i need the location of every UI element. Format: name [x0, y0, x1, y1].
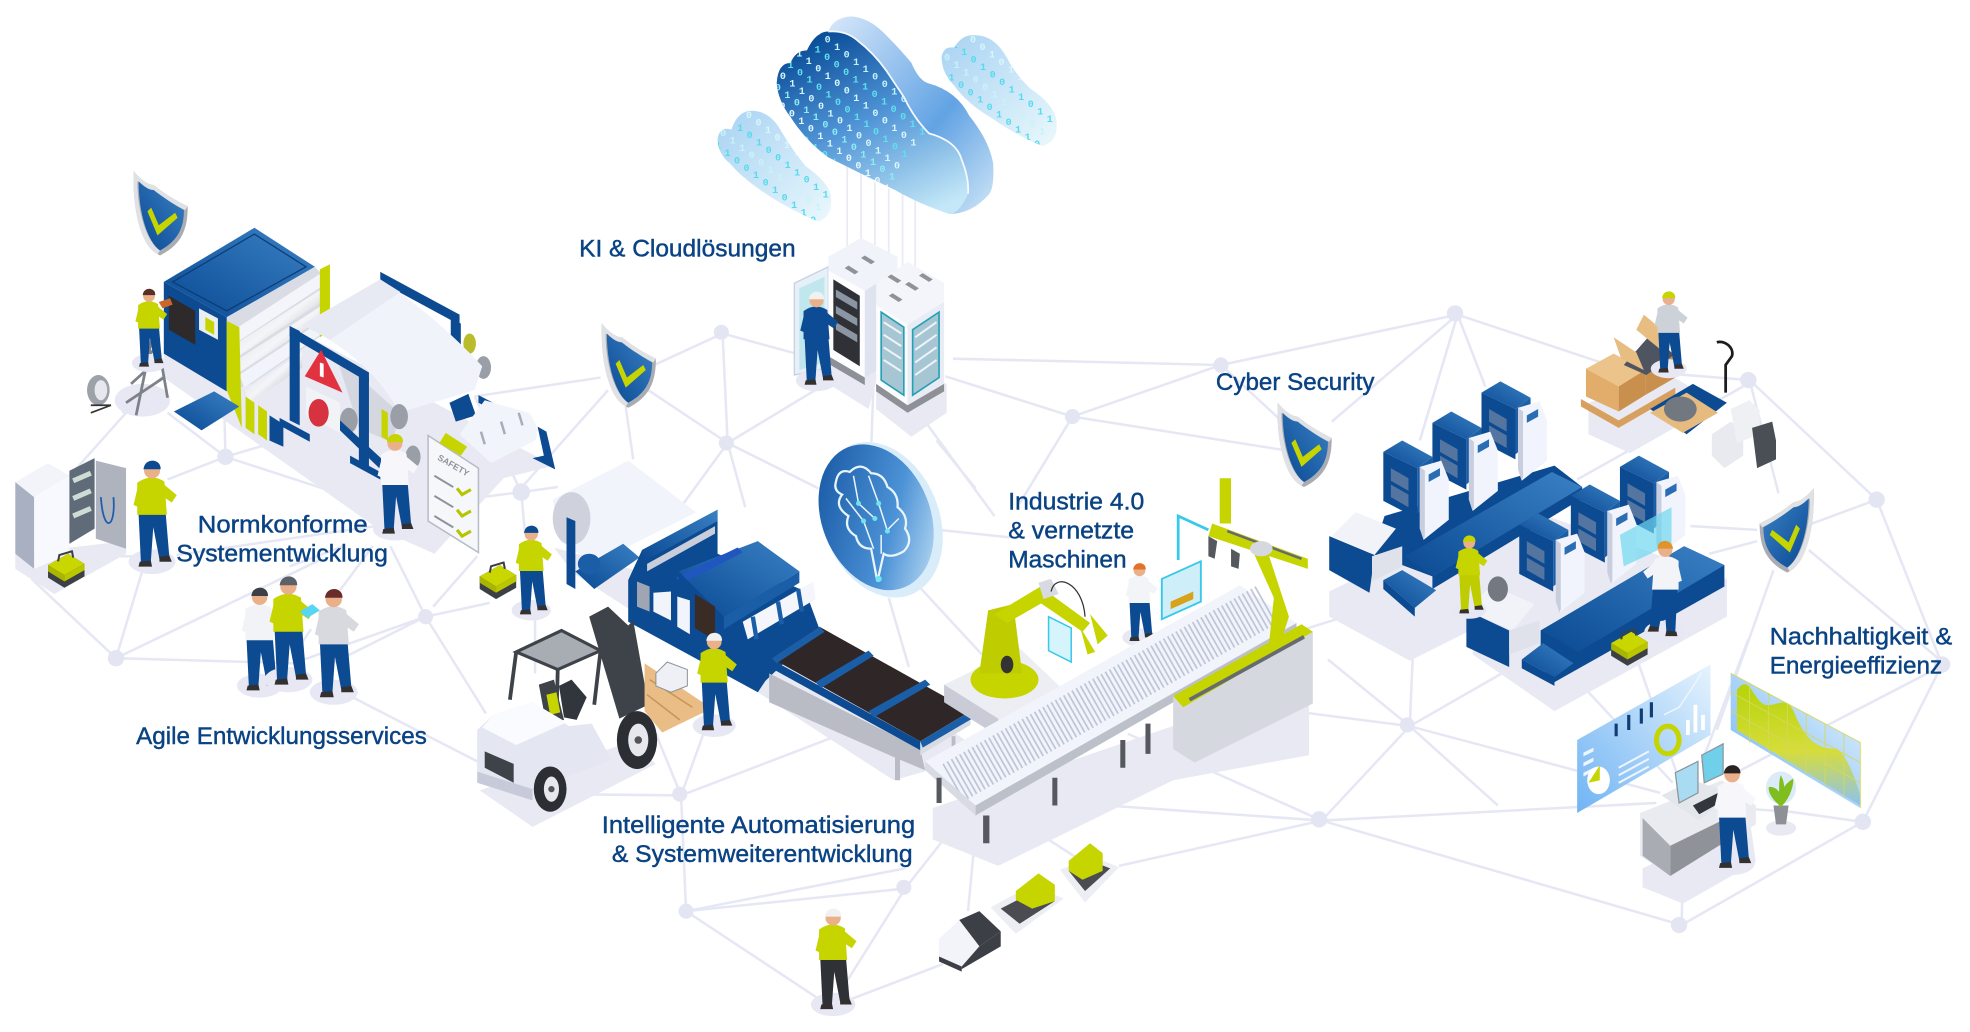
small cloud left: 1 1 0 0 1 0 1 0 1 1 0: [710, 139, 821, 230]
team of three people: [237, 576, 359, 705]
heading: Cyber Security: Cyber Security: [1216, 369, 1375, 396]
big data cloud: 1 0 0 1 1 0 1 0 1 1 0 0 1 1: [750, 96, 890, 209]
small cloud left: 1 0 0 1 0 1 1 0 0 1 0: [731, 101, 843, 192]
contactors: [1712, 400, 1776, 468]
shield top left: [133, 171, 188, 255]
worker at pallet: [693, 633, 737, 737]
small cloud left: 0 1 1 0 0 1 1 1 0 0 1: [715, 126, 826, 217]
server racks with technician: [794, 238, 944, 413]
worker with tablet: [811, 908, 857, 1016]
heading: KI & Cloudlösungen: KI & Cloudlösungen: [579, 236, 796, 263]
small cloud left: [718, 110, 832, 222]
small cloud left: 1 1 0 1 0 1 0 1 1 0 1: [707, 164, 819, 255]
shield right: [1760, 488, 1814, 573]
engineer with hologram: [1122, 516, 1208, 646]
big data cloud: 1 0 1 1 0 1 0 0 1 1 0 0 1 1: [745, 131, 885, 244]
safety checklist: SAFETY: [436, 452, 471, 479]
printing press rear: [1329, 381, 1582, 617]
plant in light bulb: [1766, 771, 1796, 836]
woman in white coat: [373, 434, 418, 541]
small cloud right: 1 0 1 0 0 1 1 0 0 1 1: [931, 76, 1043, 167]
big data cloud: 0 1 1 0 0 1 0 1 1 0 1 0 0 1: [747, 107, 888, 221]
heading: Agile Entwicklungsservices: Agile Entwicklungsservices: [136, 723, 427, 750]
heading: Normkonforme Systementwicklung: Normkonforme: [198, 511, 368, 538]
electrical cabinet with worker: [15, 458, 177, 588]
AGV train: [939, 843, 1119, 972]
network nodes: [108, 305, 1950, 933]
heading: Industrie 4.0 & vernetzte Maschinen: & vernetzte: [1008, 518, 1134, 545]
printing press front: [1466, 456, 1724, 686]
cloud lines to server: [847, 164, 915, 283]
dashboard left: [1577, 665, 1711, 813]
big data cloud: 1 1 0 1 0 0 1 1 0 1 1 0 1 0: [745, 118, 885, 232]
AI brain disc: [797, 423, 965, 616]
paper roll centre: [553, 461, 696, 564]
heading: Industrie 4.0 & vernetzte Maschinen: Maschinen: [1008, 547, 1127, 574]
yellow gantry robot and cabinet: [1173, 478, 1313, 763]
heading: Normkonforme Systementwicklung: Systementwicklung: [176, 540, 388, 567]
small cloud left: 1 0 1 0 0 1 1 0 0 1 1: [707, 151, 819, 242]
big data cloud: 1 0 1 0 0 0 1 1 0 1 0 0 1 1: [790, 28, 931, 141]
heading: Nachhaltigkeit & Energieeffizienz: [1770, 623, 1952, 679]
small cloud right: 0 1 1 0 0 1 1 1 0 0 1: [939, 50, 1051, 142]
heading: Intelligente Automatisierung & Systemweiterentwicklung: & Systemweiterentwicklung: [612, 841, 913, 868]
roller hints behind sheet: [463, 334, 476, 354]
heading: Intelligente Automatisierung & Systemweiterentwicklung: Intelligente Automatisierung: [602, 812, 915, 839]
small cloud right: 1 1 0 1 0 1 0 1 1 0 1: [931, 88, 1043, 179]
safety checklist: [428, 433, 478, 552]
big data cloud: 1 1 0 1 0 1 0 0 1 1 0 1 0 1: [773, 50, 913, 164]
control console with operator: [1640, 744, 1756, 876]
big data cloud: 0 1 1 0 1 0 0 1 1 0 0 1 0 1: [781, 39, 922, 153]
floor shadows: [15, 340, 1756, 904]
big data cloud: 1 0 1 1 0 0 1 0 1 0 0 1 1 0: [765, 62, 905, 175]
roller conveyor: [925, 585, 1296, 843]
small cloud right: 1 0 0 1 0 1 1 0 0 1 0: [955, 25, 1067, 116]
central blue machine with conveyor: [628, 510, 974, 780]
big data cloud: 1 0 0 1 0 1 1 0 0 1 0 1 1 0: [800, 18, 941, 131]
big data cloud: 1 1 0 0 1 0 1 1 1 0 0 1 0 1: [755, 84, 895, 198]
left printing machine: [164, 228, 491, 493]
small cloud right: 1 1 0 1 0 0 1 1 0 1 1: [946, 38, 1058, 129]
yellow robot arm: [944, 579, 1108, 736]
small cloud left: 1 1 0 1 0 0 1 1 0 1 1: [722, 113, 834, 205]
dashboard energy chart: [1731, 673, 1860, 808]
network background lines: [32, 315, 1942, 1007]
shield cyber security: [1278, 403, 1332, 487]
heading: Intelligente Automatisierung & Systemweiterentwicklung: [602, 812, 915, 868]
small paper roll with frame: [449, 394, 555, 469]
big data cloud: [776, 16, 994, 214]
heading: Industrie 4.0 & vernetzte Maschinen: Industrie 4.0: [1008, 489, 1144, 516]
kneeling worker and toolbox: [480, 517, 640, 621]
shield centre left: [602, 323, 656, 408]
forklift with driver: [477, 607, 706, 812]
heading: Normkonforme Systementwicklung: [176, 511, 388, 567]
press workers and toolbox: [1452, 535, 1686, 666]
heading: Nachhaltigkeit & Energieeffizienz: Nachhaltigkeit &: [1770, 623, 1952, 650]
worker on ladder with cable reel: [87, 289, 173, 417]
heading: Nachhaltigkeit & Energieeffizienz: Energieeffizienz: [1770, 652, 1942, 679]
boxes on pallet with worker: [1581, 291, 1732, 434]
small cloud right: [942, 35, 1057, 146]
heading: Industrie 4.0 & vernetzte Maschinen: [1008, 489, 1144, 574]
big data cloud: 0 0 1 0 1 1 0 0 1 0 1 1 0 1: [760, 73, 900, 187]
small cloud right: 1 1 0 0 1 0 1 0 1 1 0: [934, 63, 1045, 154]
